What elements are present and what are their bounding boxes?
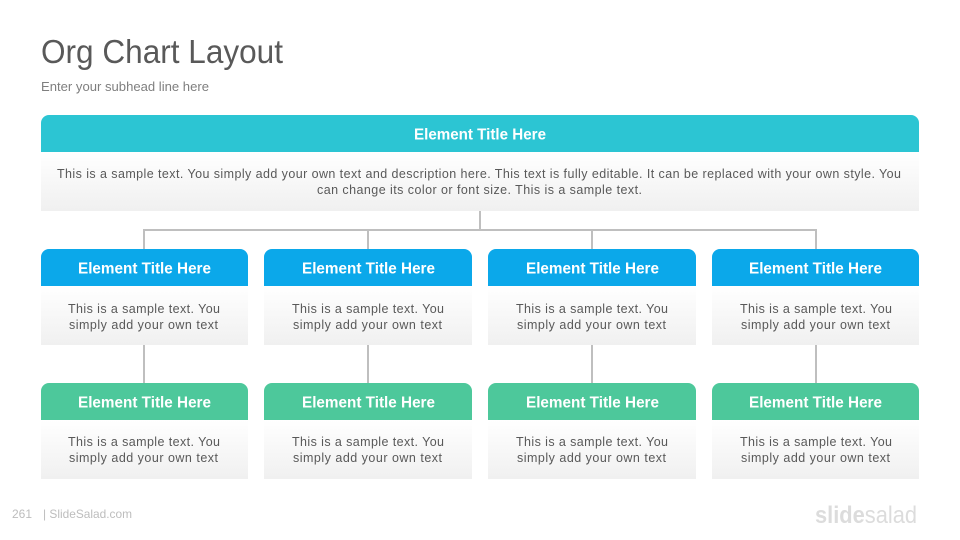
panel: green element 3: simply add your own text xyxy=(517,451,667,465)
panel: blue element 2: Element Title Here xyxy=(302,260,435,278)
panel: green element 4: Element Title Here xyxy=(749,394,882,412)
panel: blue element 2: simply add your own text xyxy=(293,318,443,332)
title: Org Chart Layout xyxy=(41,33,283,70)
panel: green element 2: simply add your own text xyxy=(293,451,443,465)
panel: green element 3: This is a sample text. You xyxy=(516,435,668,449)
panel: green element 1 xyxy=(41,383,248,479)
panel: green element 2 xyxy=(264,383,472,479)
panel: top element: This is a sample text. You simply add your own text and description here. This text is fully editable. It can be replaced with your own style. You xyxy=(57,167,901,181)
panel: green element 2: Element Title Here xyxy=(302,394,435,412)
panel: green element 1: This is a sample text. You xyxy=(68,435,220,449)
page number: 261 xyxy=(12,507,32,521)
panel: blue element 4: Element Title Here xyxy=(749,260,882,278)
subhead: Enter your subhead line here xyxy=(41,79,209,94)
panel: blue element 2: This is a sample text. You xyxy=(292,302,444,316)
panel: top element: Element Title Here xyxy=(414,126,546,144)
panel: green element 1: simply add your own text xyxy=(69,451,219,465)
panel: blue element 3: simply add your own text xyxy=(517,318,667,332)
panel: blue element 3: Element Title Here xyxy=(526,260,659,278)
footer site name: | SlideSalad.com xyxy=(43,507,132,521)
panel: green element 3: Element Title Here xyxy=(526,394,659,412)
panel: blue element 4 xyxy=(712,249,919,345)
panel: blue element 4: simply add your own text xyxy=(741,318,891,332)
logo wordmark: slidesalad xyxy=(815,502,917,529)
panel: green element 4: This is a sample text. You xyxy=(740,435,892,449)
connector lines xyxy=(143,211,817,383)
panel: blue element 1: This is a sample text. You xyxy=(68,302,220,316)
panel: blue element 3: This is a sample text. You xyxy=(516,302,668,316)
panel: blue element 1 xyxy=(41,249,248,345)
panel: green element 4 xyxy=(712,383,919,479)
panel: green element 2: This is a sample text. You xyxy=(292,435,444,449)
panel: green element 3 xyxy=(488,383,696,479)
panel: green element 1: Element Title Here xyxy=(78,394,211,412)
panel: top element: can change its color or font size. This is a sample text. xyxy=(317,183,642,197)
panel: green element 4: simply add your own text xyxy=(741,451,891,465)
panel: top element xyxy=(41,115,919,211)
panel: blue element 2 xyxy=(264,249,472,345)
panel: blue element 1: simply add your own text xyxy=(69,318,219,332)
panel: blue element 1: Element Title Here xyxy=(78,260,211,278)
panel: blue element 4: This is a sample text. You xyxy=(740,302,892,316)
panel: blue element 3 xyxy=(488,249,696,345)
